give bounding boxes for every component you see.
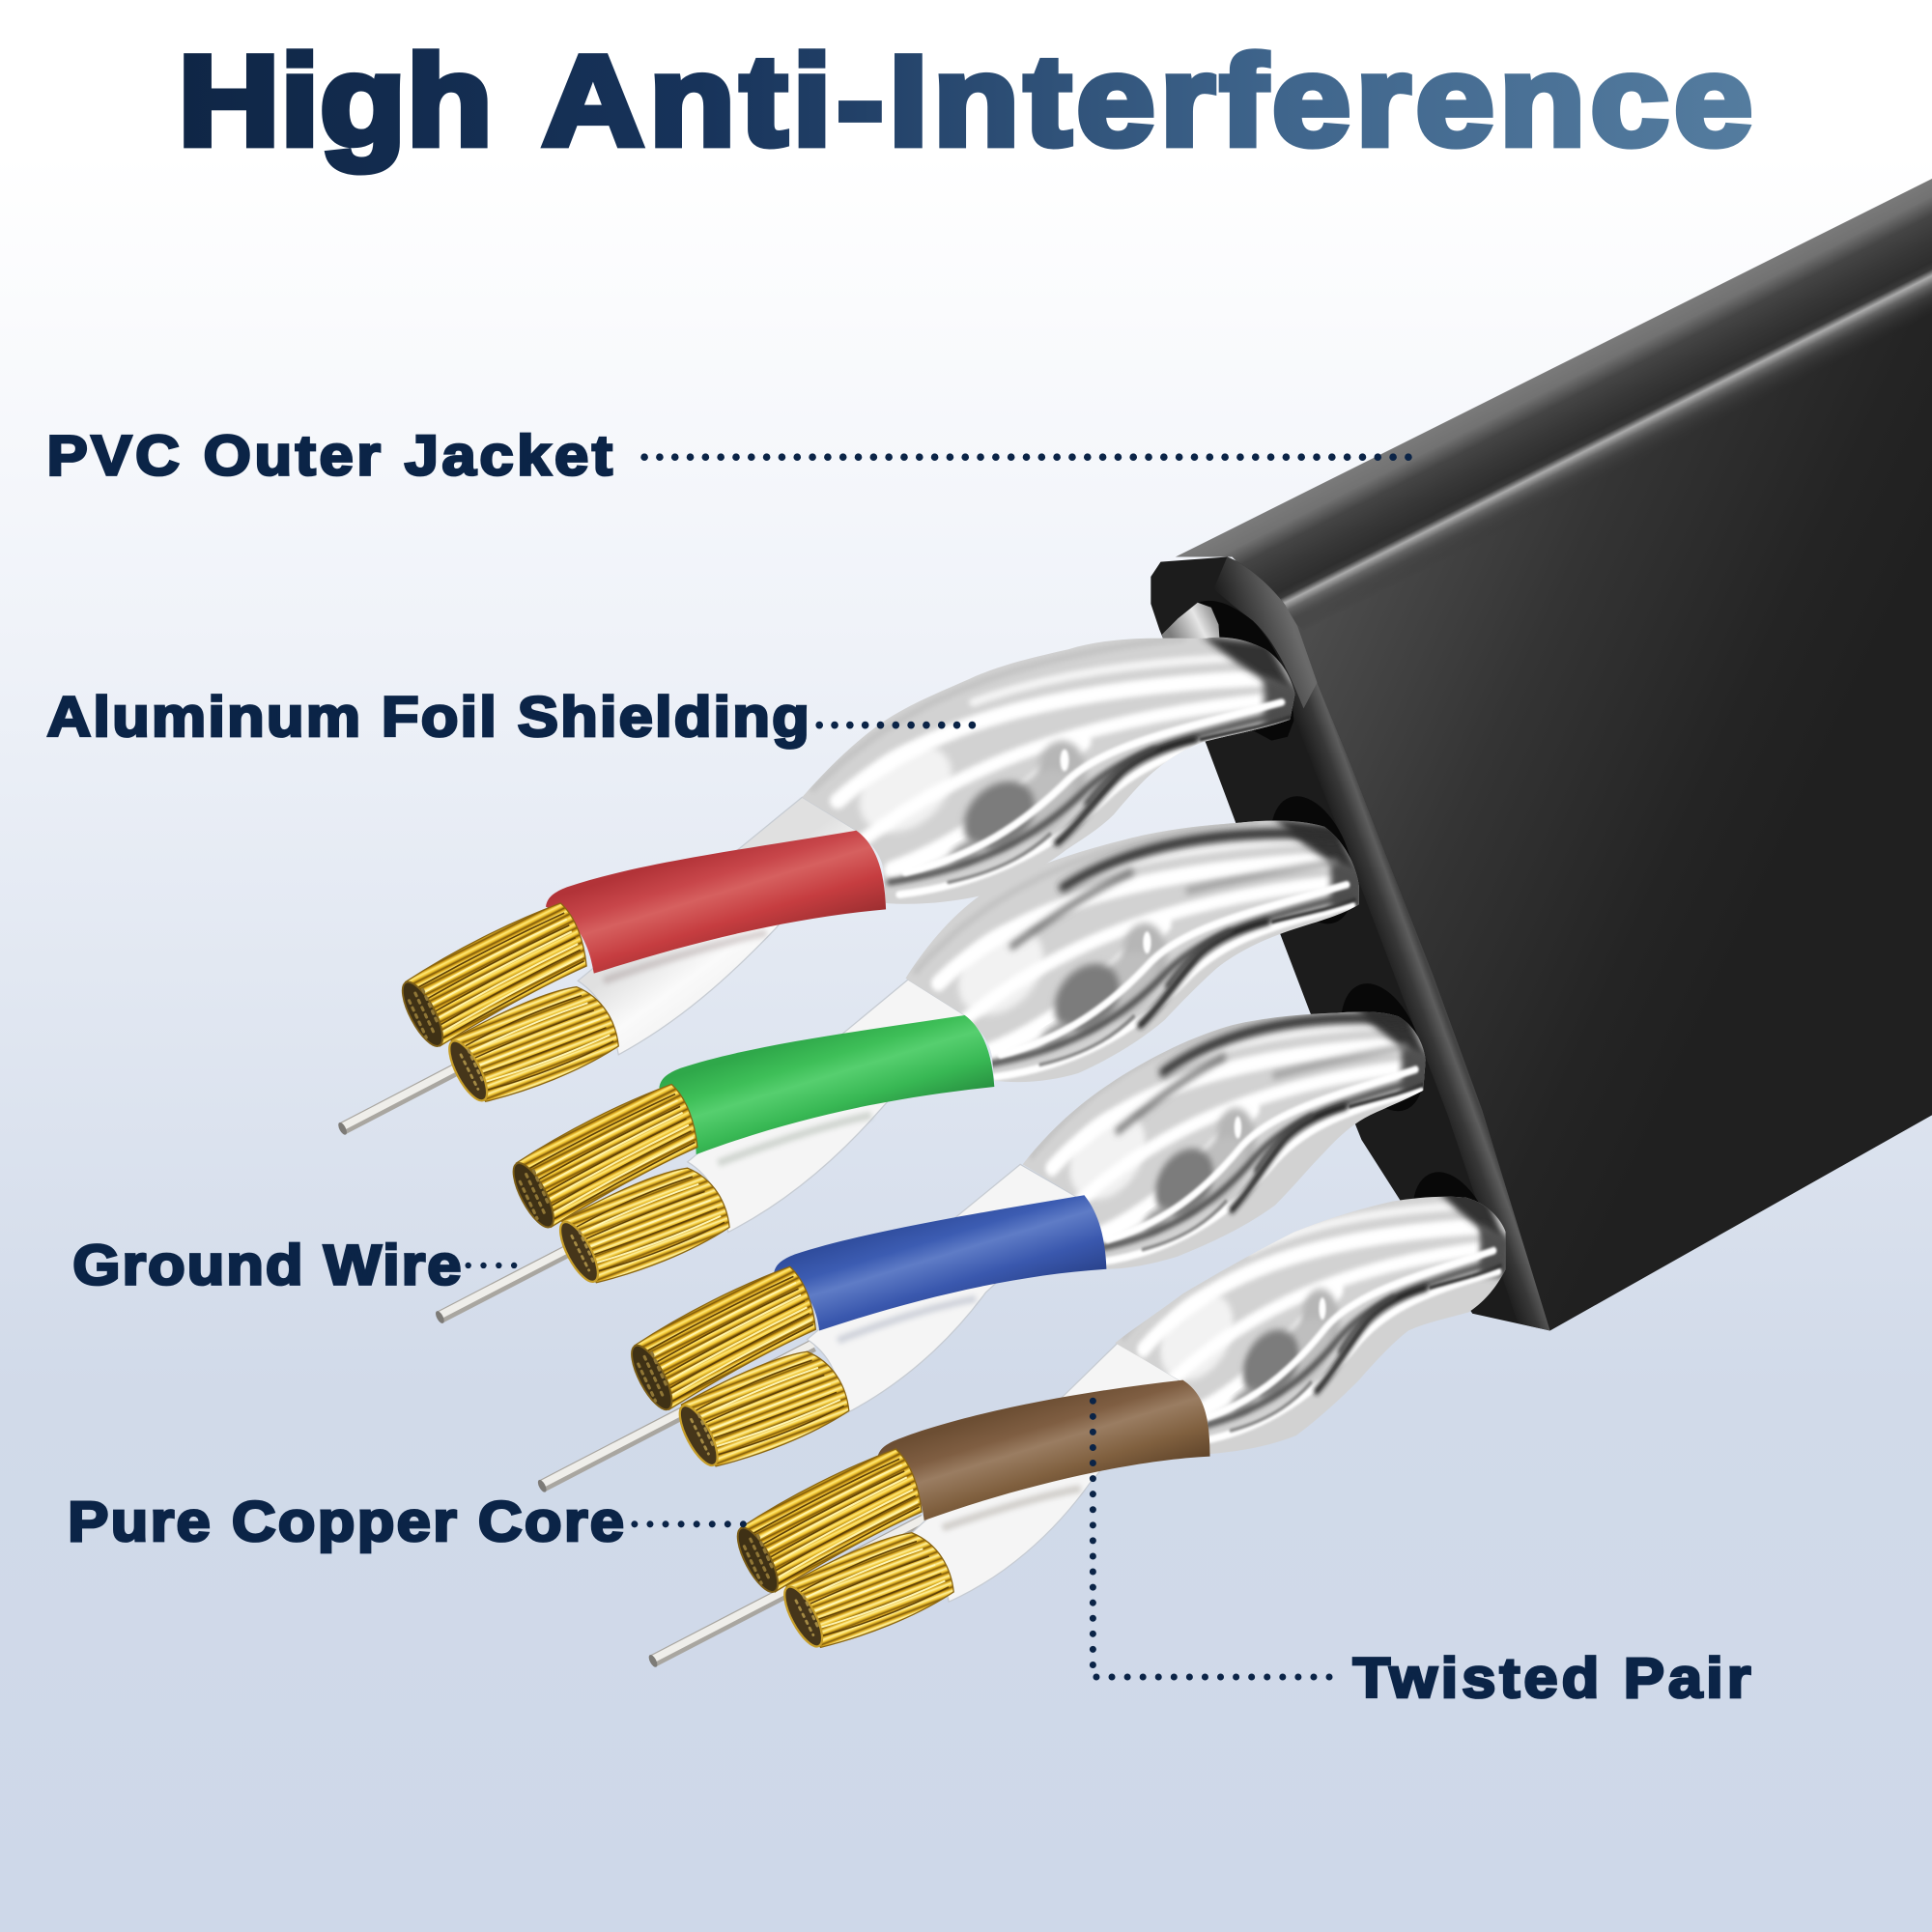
flat cable black jacket	[1151, 179, 1932, 1331]
ground wire	[434, 1186, 690, 1324]
brown conductor copper	[730, 1449, 922, 1597]
jacket main face	[1285, 283, 1932, 1331]
title: Anti-Interference	[542, 29, 1752, 172]
ground wire	[647, 1519, 924, 1668]
aluminum foil shield	[906, 821, 1359, 1082]
white conductor	[912, 1343, 1179, 1602]
aluminum foil shield	[1115, 1196, 1506, 1454]
label: Ground Wire: Ground Wire	[72, 1234, 461, 1296]
twisted pair: green	[434, 799, 1380, 1324]
white conductor	[688, 980, 965, 1233]
leader line: Pure Copper Core	[635, 1521, 747, 1527]
tube shadow on white conductor	[838, 1298, 976, 1341]
aluminum foil shield	[1023, 1011, 1426, 1269]
green insulation	[659, 1015, 994, 1154]
blue conductor copper	[624, 1266, 815, 1415]
white conductor copper	[554, 1168, 729, 1287]
blue insulation	[774, 1195, 1106, 1331]
white conductor copper	[672, 1351, 849, 1470]
white conductor copper	[442, 987, 618, 1106]
label: Aluminum Foil Shielding: Aluminum Foil Shielding	[46, 685, 810, 749]
white conductor	[807, 1164, 1084, 1414]
tube shadow on white conductor	[719, 1115, 871, 1163]
label: PVC Outer Jacket: PVC Outer Jacket	[46, 424, 612, 487]
twisted pair: red	[336, 616, 1319, 1136]
leader line: Ground Wire	[469, 1263, 519, 1267]
label: Twisted Pair: Twisted Pair	[1353, 1646, 1750, 1710]
ground wire	[336, 1004, 579, 1136]
twisted pair: brown	[647, 1164, 1523, 1668]
green conductor copper	[506, 1084, 697, 1233]
leader line: Aluminum Foil Shielding	[819, 723, 977, 728]
jacket rim top bevel	[1213, 557, 1318, 708]
twisted pair: blue	[536, 983, 1446, 1493]
label: Pure Copper Core: Pure Copper Core	[68, 1490, 624, 1553]
jacket rim bevel	[1282, 626, 1550, 1331]
red insulation	[546, 831, 886, 974]
jacket holes	[1198, 601, 1512, 1311]
tube shadow on white conductor	[943, 1489, 1081, 1528]
foil inside first hole	[1162, 603, 1220, 643]
white conductor copper	[778, 1533, 953, 1652]
title: High	[178, 29, 493, 172]
leader line: Twisted Pair	[1093, 1401, 1336, 1677]
red conductor copper	[395, 903, 586, 1051]
tube shadow on white conductor	[604, 933, 766, 980]
jacket top face	[1176, 179, 1932, 631]
ground wire	[536, 1344, 813, 1493]
leader line: PVC Outer Jacket	[644, 454, 1412, 460]
white conductor	[578, 797, 856, 1055]
brown insulation	[877, 1380, 1210, 1520]
jacket front rim	[1151, 557, 1550, 1331]
aluminum foil shield	[802, 638, 1294, 904]
